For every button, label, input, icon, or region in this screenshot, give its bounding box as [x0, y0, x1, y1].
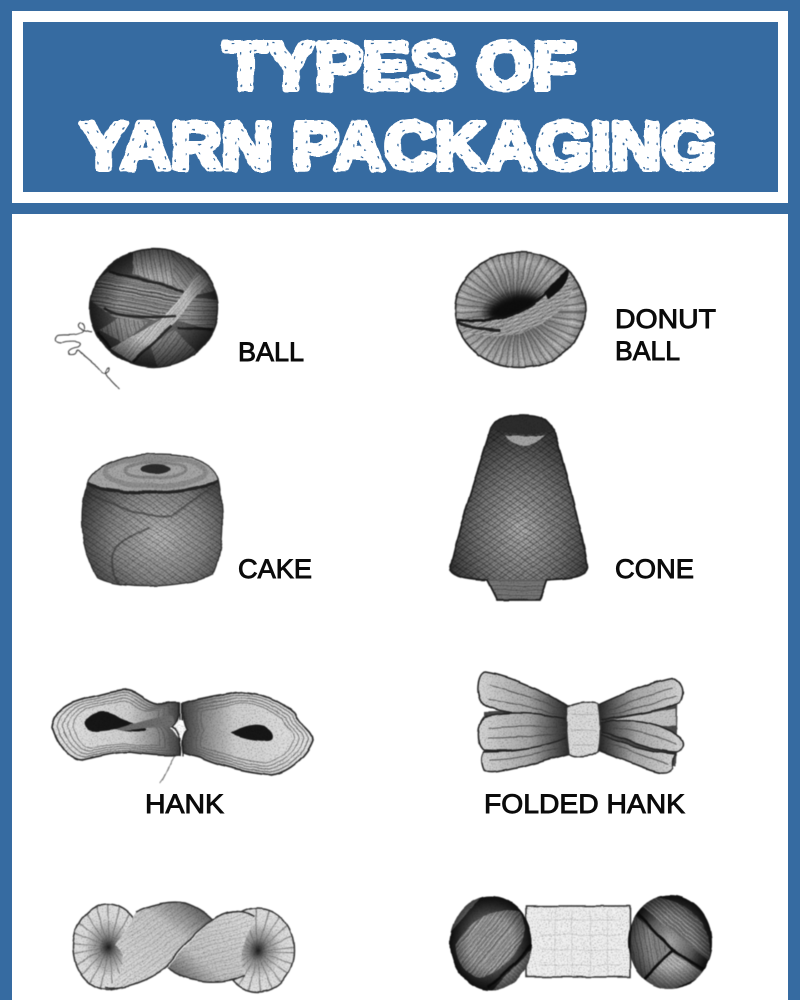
hank thread — [160, 756, 174, 783]
icon: twisted skein — [73, 902, 294, 992]
label: cone: CONE — [615, 554, 694, 584]
label: donut ball: BALL — [615, 336, 680, 366]
label: donut ball: DONUT — [615, 304, 716, 334]
icon: donut ball — [455, 252, 585, 368]
icon: yarn ball — [55, 249, 218, 389]
label: cake: CAKE — [238, 554, 312, 584]
radial strands — [476, 272, 556, 352]
paper band — [526, 906, 630, 977]
title text: TYPES OF — [224, 29, 576, 104]
paper band — [566, 702, 600, 757]
icon: hank — [52, 690, 313, 783]
title banner — [12, 11, 788, 203]
icon: yarn cone — [445, 410, 595, 605]
icon: folded hank — [478, 672, 683, 773]
label: folded hank: FOLDED HANK — [484, 789, 685, 819]
icon: skein with paper band — [448, 895, 712, 990]
title text — [80, 29, 716, 184]
yarn tail — [55, 323, 120, 389]
title text: TYPES OF — [224, 29, 576, 104]
title text: YARN PACKAGING — [80, 109, 716, 184]
content panel — [12, 214, 788, 1000]
label: hank: HANK — [145, 789, 224, 819]
hank openings — [84, 712, 146, 732]
label: donut ball — [615, 304, 716, 366]
hank strand lines — [57, 693, 308, 772]
label: ball: BALL — [238, 337, 304, 367]
title text: YARN PACKAGING — [80, 109, 716, 184]
icon: yarn cake — [78, 450, 228, 590]
